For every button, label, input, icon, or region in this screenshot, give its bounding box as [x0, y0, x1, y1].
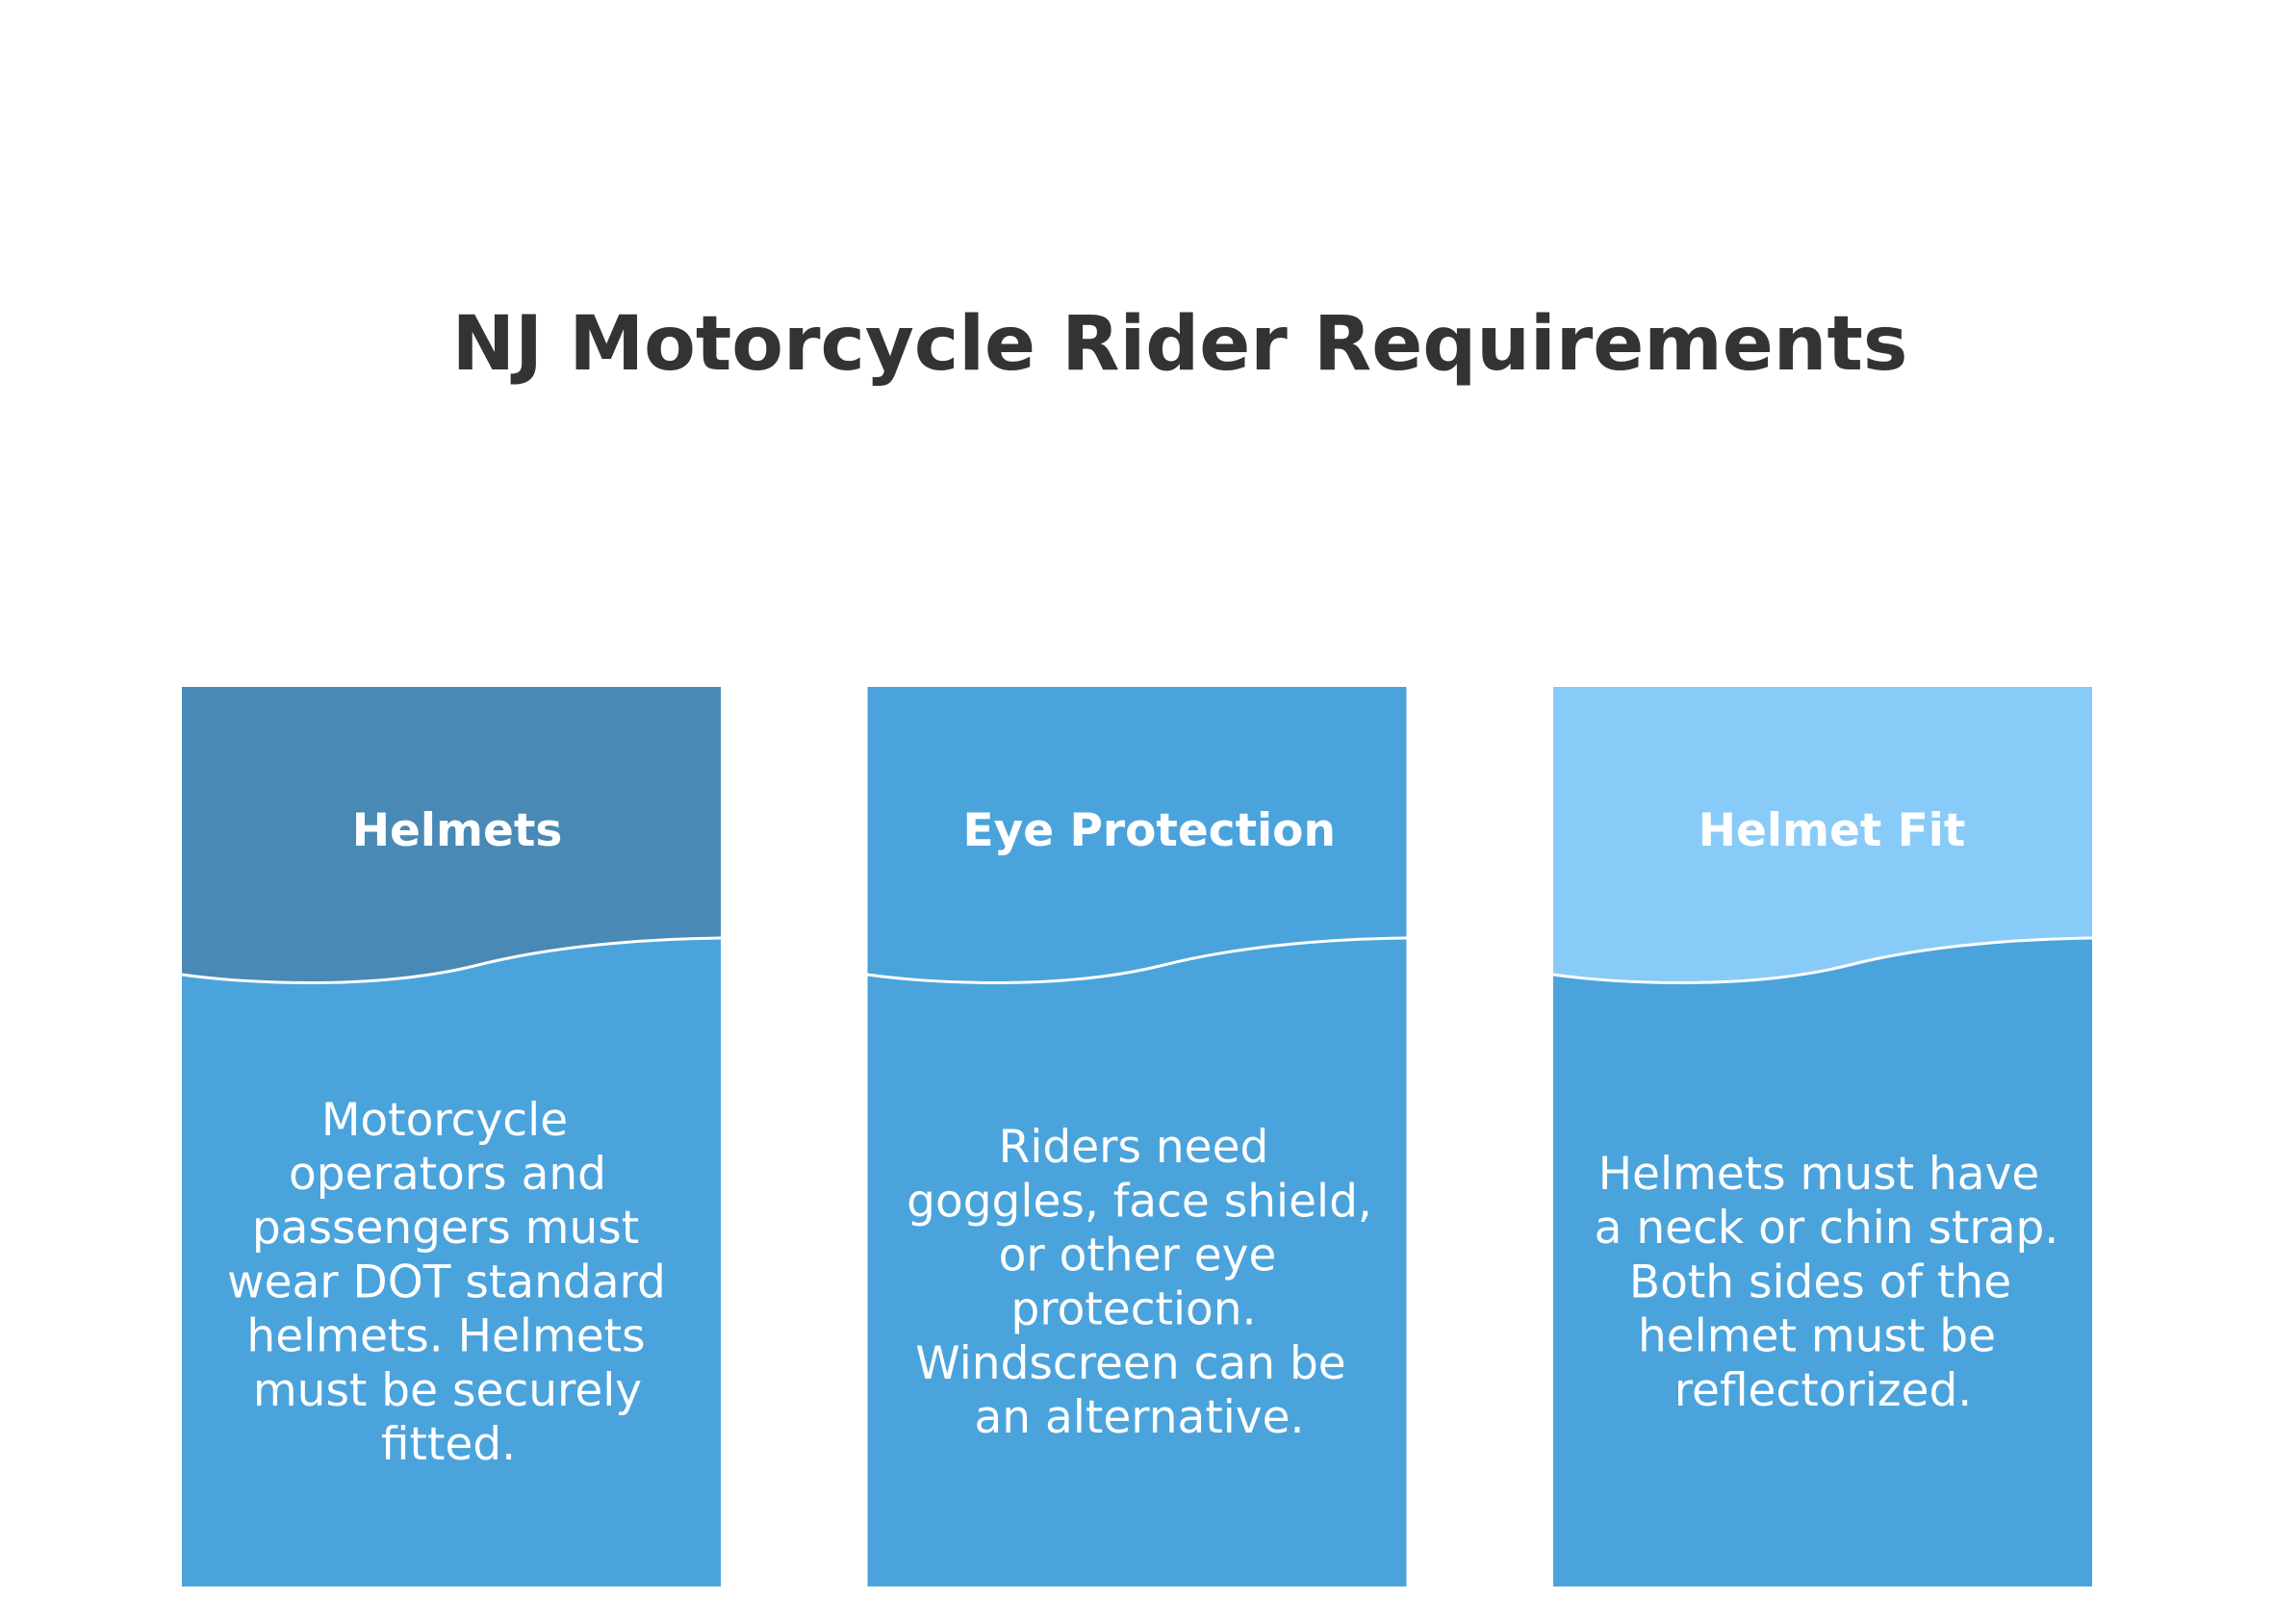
panel: eye protection: [868, 687, 1407, 1586]
panel header: helmets: [182, 687, 721, 983]
text block: eye protection: Riders need: [999, 1121, 1268, 1174]
text block: helmets: passengers must: [252, 1202, 639, 1255]
text block: helmet fit: helmet must be: [1638, 1310, 1996, 1363]
text block: helmets: helmets. Helmets: [246, 1310, 646, 1363]
panel body: eye protection: [868, 687, 1407, 1586]
panel body: helmets: [182, 687, 721, 1586]
text block: helmets: wear DOT standard: [227, 1256, 666, 1308]
text block: helmets: must be securely: [253, 1364, 642, 1417]
text block: eye protection: goggles, face shield,: [907, 1175, 1372, 1228]
text block: helmet fit: reflectorized.: [1674, 1364, 1972, 1417]
text block: helmet fit: Helmets must have: [1598, 1148, 2039, 1201]
title: NJ Motorcycle Rider Requirements: [452, 300, 1907, 388]
text block: helmets: fitted.: [381, 1418, 516, 1471]
heading: helmet fit: Helmet Fit: [1699, 804, 1965, 857]
wave divider: helmet fit: [1553, 938, 2092, 983]
panel body: helmet fit: [1553, 687, 2092, 1586]
panel: helmets: [182, 687, 721, 1586]
text block: helmets: operators and: [289, 1148, 606, 1201]
text block: helmet fit: Both sides of the: [1629, 1256, 2011, 1308]
wave divider: helmets: [182, 938, 721, 983]
panel: helmet fit: [1553, 687, 2092, 1586]
heading: helmets: Helmets: [352, 804, 562, 857]
text block: eye protection: or other eye: [999, 1230, 1276, 1281]
panel header: eye protection: [868, 687, 1407, 983]
heading: eye protection: Eye Protection: [962, 804, 1336, 857]
text block: eye protection: Windscreen can be: [915, 1337, 1346, 1390]
wave divider: eye protection: [868, 938, 1407, 983]
text block: helmet fit: a neck or chin strap.: [1595, 1202, 2058, 1255]
panel header: helmet fit: [1553, 687, 2092, 983]
text block: eye protection: an alternative.: [975, 1391, 1304, 1444]
text block: helmets: Motorcycle: [321, 1094, 568, 1147]
text block: eye protection: protection.: [1010, 1283, 1257, 1336]
